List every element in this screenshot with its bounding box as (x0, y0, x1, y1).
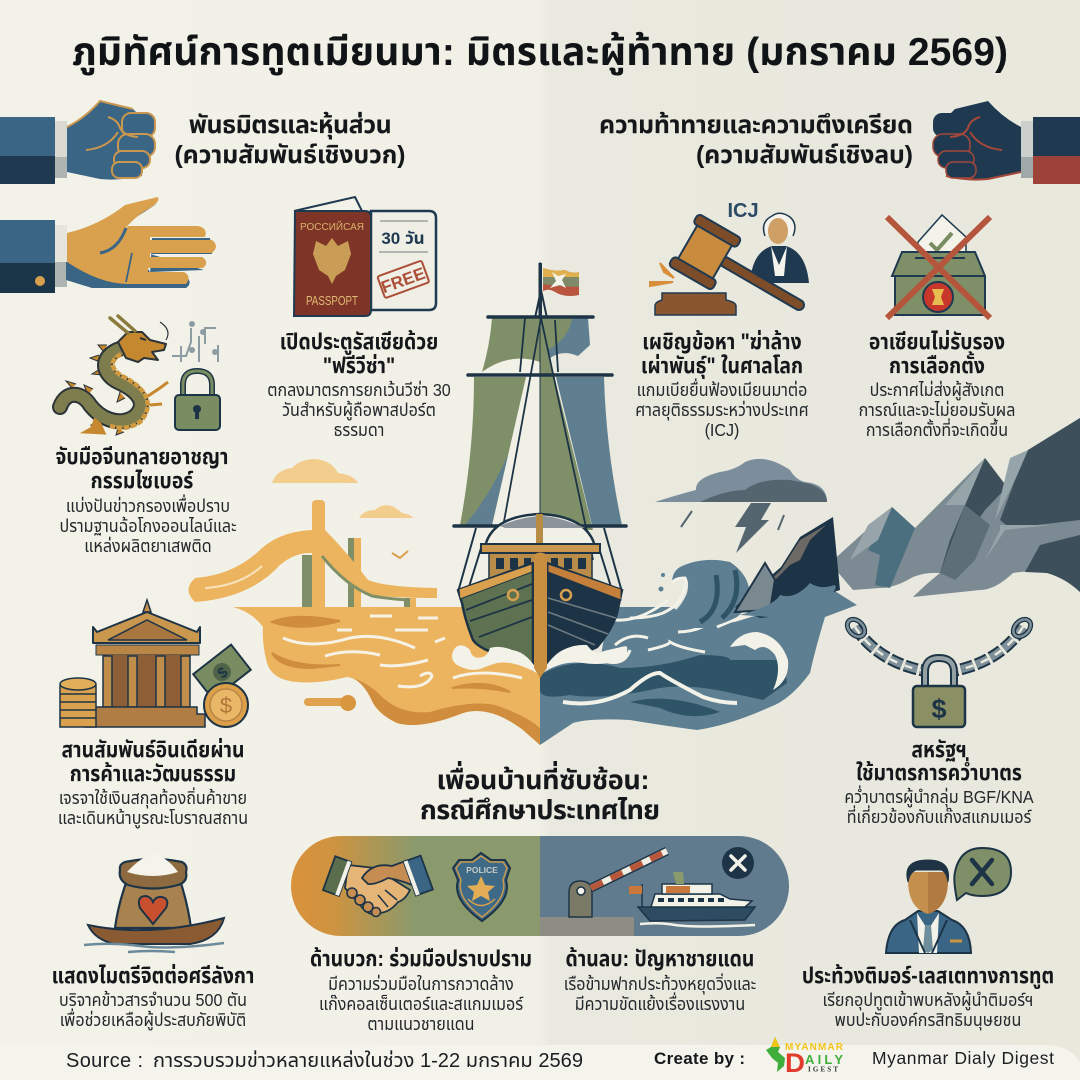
panel: Thailand pill (291, 836, 789, 936)
heading: challenges and tensions: (ความสัมพันธ์เชิงลบ) (696, 141, 913, 169)
item: China cybercrime (56, 316, 237, 556)
item: ASEAN rejects election (859, 215, 1015, 440)
item: Russia free visa: ตกลงมาตรการยกเว้นวีซ่า 30 (267, 379, 451, 400)
item: Russia free visa: 30 วัน (381, 229, 425, 248)
item: Russia free visa (267, 197, 451, 440)
icon: handshake (323, 856, 433, 916)
logo: Myanmar Daily Digest: D (785, 1048, 805, 1078)
illustration: rocks and mountains (735, 418, 1080, 618)
credit name: Myanmar Dialy Digest (872, 1048, 1054, 1068)
logo: Myanmar Daily Digest (766, 1037, 844, 1078)
item: Russia free visa: "ฟรีวีซ่า" (323, 354, 395, 378)
heading: complex neighbour Thailand: เพื่อนบ้านที่ซับซ้อน: (436, 761, 650, 795)
item: ICJ genocide case: (ICJ) (705, 420, 739, 440)
item: China cybercrime: จับมือจีนทลายอาชญา (56, 445, 228, 469)
cabin (489, 552, 592, 586)
source line: Source : (66, 1050, 143, 1072)
heading: challenges and tensions: ความท้าทายและความตึงเครียด (599, 111, 913, 139)
item: Russia free visa: ธรรมดา (334, 420, 384, 440)
heading: complex neighbour Thailand: กรณีศึกษาประเทศไทย (420, 795, 660, 825)
item: US sanctions: $ (931, 694, 947, 724)
bow foam (452, 645, 627, 675)
flag (543, 268, 579, 296)
item: ASEAN rejects election: อาเซียนไม่รับรอง (869, 330, 1005, 354)
item: China cybercrime: ปรามฐานฉ้อโกงออนไลน์และ (59, 515, 237, 536)
source line: การรวบรวมข่าวหลายแหล่งในช่วง 1-22 มกราคม 2569 (153, 1049, 583, 1072)
item: ASEAN rejects election: การเลือกตั้งที่จะเกิดขึ้น (866, 418, 1008, 440)
item: Russia free visa: FREE (379, 264, 428, 297)
item: ICJ genocide case: แกมเบียยื่นฟ้องเมียนมาต่อ (637, 378, 807, 400)
heading: allies and partners: พันธมิตรและหุ้นส่วน (189, 111, 392, 140)
text: positive side: มีความร่วมมือในการกวาดล้าง (328, 973, 514, 994)
item: ICJ genocide case: ศาลยุติธรรมระหว่างประเทศ (635, 400, 809, 421)
text: negative side: มีความขัดแย้งเรื่องแรงงาน (575, 992, 745, 1014)
heading: challenges and tensions (599, 111, 913, 169)
heading: allies and partners: (ความสัมพันธ์เชิงบวก) (174, 141, 406, 169)
item: Sri Lanka aid (52, 853, 254, 1032)
item: Sri Lanka aid: แสดงไมตรีจิตต่อศรีลังกา (52, 964, 254, 988)
item: Sri Lanka aid: เพื่อช่วยเหลือผู้ประสบภัยพิบัติ (60, 1008, 246, 1032)
lower sails (460, 377, 526, 525)
item: Timor-Leste protest (802, 848, 1054, 1031)
footer band (0, 1037, 1080, 1080)
text: positive side: แก๊งคอลเซ็นเตอร์และสแกมเมอร์ (319, 994, 524, 1014)
item: Sri Lanka aid: บริจาคข้าวสารจำนวน 500 ตัน (59, 989, 247, 1010)
item: ASEAN rejects election: การเลือกตั้ง (889, 350, 985, 378)
item: Russia free visa: PASSPOPT (306, 293, 358, 308)
item: China cybercrime: แหล่งผลิตยาเสพติด (84, 536, 212, 556)
logo: Myanmar Daily Digest: AILY (805, 1052, 843, 1067)
dome (486, 514, 594, 543)
heading: allies and partners (174, 111, 406, 169)
item: India trade and culture: เจรจาใช้เงินสกุลท้องถิ่นค้าขาย (59, 787, 247, 809)
item: India trade and culture (58, 600, 251, 830)
illustration: sailing ship (452, 262, 627, 678)
upper sails (482, 318, 540, 372)
logo: Myanmar Daily Digest: IGEST (808, 1066, 838, 1074)
illustration: bridge and sunny sky (188, 459, 437, 621)
illustration: calm golden sea (233, 607, 540, 745)
icon: police badge: POLICE (466, 865, 498, 875)
logo: Myanmar Daily Digest: MYANMAR (785, 1042, 844, 1053)
credit: Create by : (654, 1049, 745, 1068)
title: ภูมิทัศน์การทูตเมียนมา: มิตรและผู้ท้าทาย (มกราคม 2569) (72, 31, 1008, 75)
item: US sanctions: ใช้มาตรการคว่ำบาตร (856, 757, 1022, 785)
item: Russia free visa: เปิดประตูรัสเซียด้วย (280, 330, 438, 355)
text: negative side: ด้านลบ: ปัญหาชายแดน (566, 947, 754, 971)
icon: police badge (453, 853, 510, 921)
icon: open hand (0, 197, 216, 293)
icon: stopped ferry (629, 847, 755, 926)
item: US sanctions: คว่ำบาตรผู้นำกลุ่ม BGF/KNA (844, 785, 1034, 809)
item: India trade and culture: สานสัมพันธ์อินเดียผ่าน (62, 738, 244, 762)
icon: border barrier (540, 851, 667, 936)
item: Timor-Leste protest: พบปะกับองค์กรสิทธิมนุษยชน (835, 1010, 1021, 1031)
item: ICJ genocide case: เผชิญข้อหา "ฆ่าล้าง (642, 330, 802, 354)
item: ICJ genocide case (635, 200, 809, 440)
illustration: stormy sea (540, 560, 857, 745)
text: positive side: ด้านบวก: ร่วมมือปราบปราม (310, 947, 532, 971)
item: US sanctions (844, 616, 1034, 827)
heading: complex neighbour Thailand (420, 761, 660, 825)
item: ICJ genocide case: เผ่าพันธุ์" ในศาลโลก (641, 354, 803, 379)
text: negative side (564, 947, 757, 1014)
item: US sanctions: ที่เกี่ยวข้องกับแก๊งสแกมเมอร์ (847, 805, 1032, 827)
item: India trade and culture: การค้าและวัฒนธรรม (70, 762, 236, 786)
item: ASEAN rejects election: ประกาศไม่ส่งผู้สังเกต (870, 379, 1004, 402)
item: ICJ genocide case: ICJ (727, 200, 759, 222)
item: Timor-Leste protest: ประท้วงติมอร์-เลสเตทางการทูต (802, 964, 1054, 989)
item: China cybercrime: แบ่งปันข่าวกรองเพื่อปราบ (66, 494, 230, 516)
item: Russia free visa: РОССИЙСАЯ (300, 220, 364, 233)
text: negative side: เรือข้ามฟากประท้วงหยุดวิ่งและ (564, 973, 757, 995)
item: Timor-Leste protest: เรียกอุปทูตเข้าพบหลังผู้นำติมอร์ฯ (823, 989, 1033, 1012)
item: India trade and culture: $ (214, 664, 232, 682)
item: India trade and culture: $ (220, 693, 232, 718)
illustration: storm cloud (655, 459, 827, 553)
text: positive side (310, 947, 532, 1034)
icon: navy fist (challenges) (933, 101, 1080, 184)
item: ASEAN rejects election: การณ์และจะไม่ยอมรับผล (859, 400, 1015, 420)
dragon (60, 316, 168, 435)
icon: blue fist (allies) (0, 101, 155, 184)
item: India trade and culture: และเดินหน้าบูรณะโบราณสถาน (58, 807, 248, 830)
text: positive side: ตามแนวชายแดน (367, 1014, 475, 1034)
item: Russia free visa: วันสำหรับผู้ถือพาสปอร์ต (282, 399, 436, 422)
hull (458, 563, 537, 670)
item: China cybercrime: กรรมไซเบอร์ (91, 469, 194, 493)
rigging and yards (539, 262, 541, 530)
item: US sanctions: สหรัฐฯ (911, 738, 967, 762)
